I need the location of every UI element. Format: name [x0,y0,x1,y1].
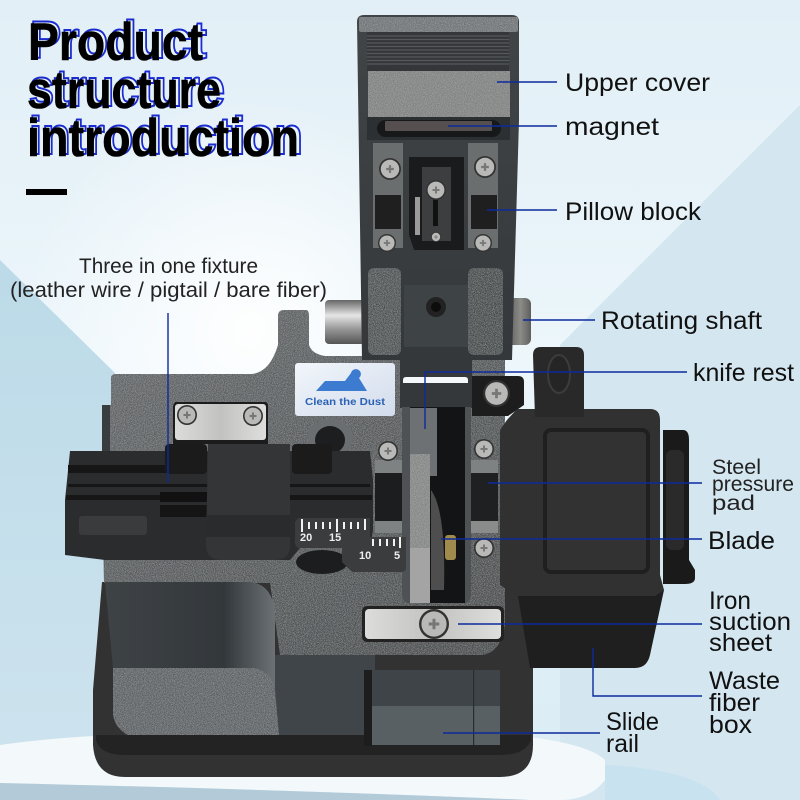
lid inset [545,430,648,572]
steel pressure pads [375,439,498,558]
lid tab [533,347,584,417]
under-ruler hole [296,550,348,574]
label: rotating shaft: Rotating shaft [601,307,762,335]
brass post [445,535,456,560]
title: introduction [27,109,299,168]
rotating shaft right [505,298,531,345]
label: knife rest: knife rest [693,359,794,387]
center clamp [409,157,464,250]
label: waste fiber box: box [709,711,753,739]
dust label: Clean the Dust [305,397,386,408]
top plate [102,310,505,655]
fixture hinges [165,444,207,474]
label: steel pressure pad: pad [712,492,755,515]
label: three in one fixture [10,255,327,483]
label: knife rest [425,359,794,429]
lid [500,409,664,596]
label: iron suction sheet: sheet [709,629,772,657]
blade disc [431,490,444,590]
hinge right [468,268,503,355]
ruler: 15 [329,532,341,544]
tray wall [105,582,275,735]
label: waste fiber box [593,648,780,739]
label: three in one fixture: Three in one fixture [79,255,258,278]
slide rail [364,670,500,746]
plate left shadow [102,405,110,451]
ruler: 10 [359,550,371,562]
grey cover block [368,71,510,117]
hinge [663,430,695,584]
label: slide rail: Slide [606,708,659,736]
steel plate [173,402,268,444]
hole [307,419,353,455]
icon: scraper [316,369,367,391]
label: steel pressure pad: Steel [712,456,761,479]
title: Product [28,13,203,72]
ruler [295,518,406,572]
label: slide rail: rail [606,730,639,758]
label: waste fiber box: fiber [709,689,760,717]
label: magnet: magnet [565,113,659,141]
label: steel pressure pad: pressure [712,473,794,496]
dust label [295,363,395,416]
title: structure [29,59,225,118]
fixture grooves [66,465,372,535]
box body [517,590,664,668]
cutter device [65,15,695,777]
label: iron suction sheet [458,587,791,657]
label: slide rail [443,708,659,758]
shaft bolt [472,376,524,416]
hinge center [404,285,468,347]
slot surround [400,358,472,408]
top white gap [403,377,468,383]
lower front body [275,655,375,735]
rotating shaft left [325,300,365,344]
title underline [26,189,67,195]
pillow block left [373,143,403,252]
rubber base [93,582,533,777]
pillow block right [468,143,498,252]
magnet slot [367,117,510,140]
upper cover assembly [325,15,531,360]
label: iron suction sheet: Iron [709,587,751,615]
title [27,11,303,168]
hinge left [368,268,401,355]
title: introduction [29,107,303,166]
label: pillow block: Pillow block [565,198,702,226]
label: waste fiber box: Waste [709,667,780,695]
fixture body [65,451,373,560]
iron suction sheet [362,606,504,642]
three-in-one fixture [65,444,373,560]
tab oval [548,355,570,393]
knife rest [410,408,437,476]
title: Product [30,11,207,70]
cover back [357,15,519,360]
ribbed grip [367,32,509,71]
label: steel pressure pad [488,456,794,515]
slot recess [402,407,471,603]
tray floor [113,668,279,735]
ruler: 5 [394,550,400,562]
label: three in one fixture: (leather wire / pigtail / bare fiber) [10,279,327,302]
label: iron suction sheet: suction [709,608,791,636]
fixture clip [206,444,290,560]
title: structure [27,61,221,120]
waste fiber box [500,347,695,668]
ruler: 20 [300,532,312,544]
label: blade: Blade [708,527,775,555]
light arm [410,454,430,548]
blade slot [400,358,472,603]
top lip [359,17,518,32]
label: upper cover: Upper cover [565,69,710,97]
